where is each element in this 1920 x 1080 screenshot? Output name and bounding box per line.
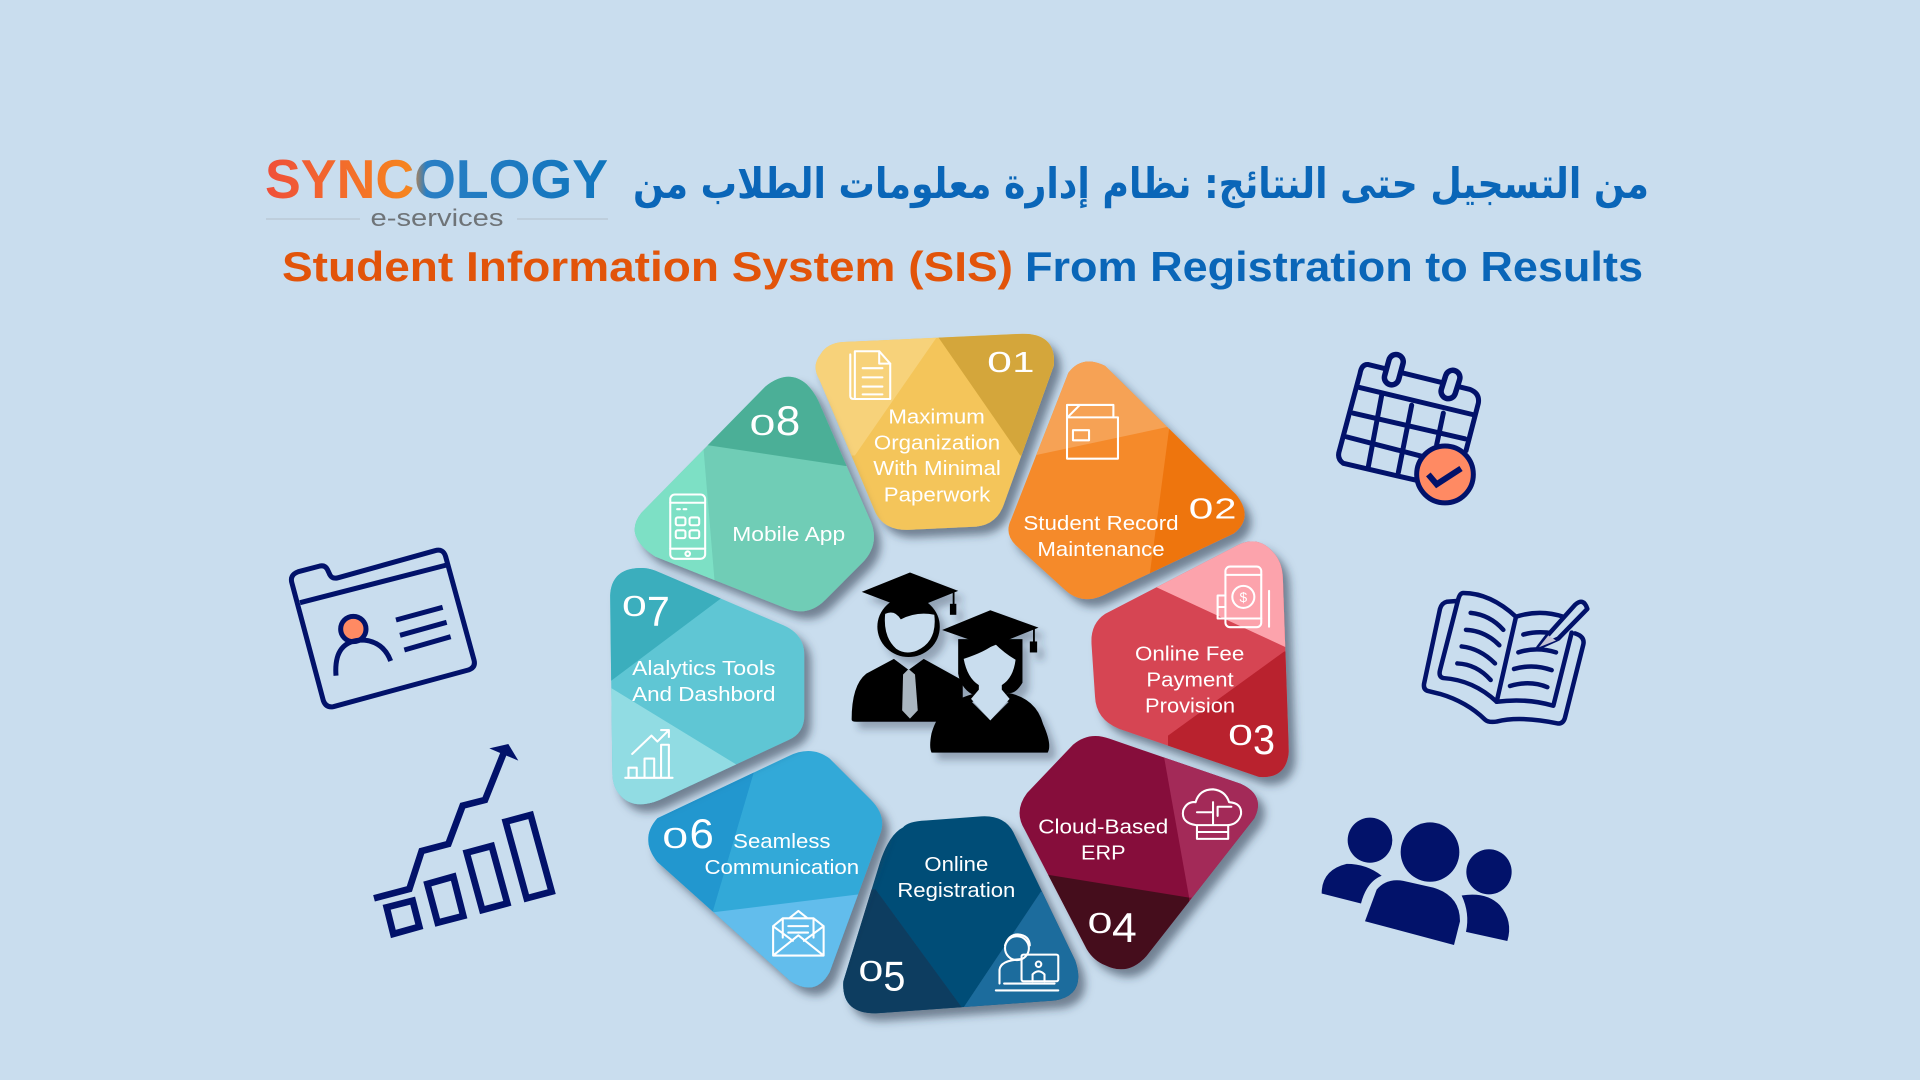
- segment 04: Cloud-Based ERP: Cloud-Based: [1038, 816, 1168, 838]
- segment 01: Maximum Organization: 1: [1012, 347, 1034, 379]
- segment 03: Online Fee Payment: Payment: [1146, 669, 1234, 691]
- icon: envelope: [773, 911, 824, 956]
- icon: phone payment: [1218, 567, 1269, 627]
- segment 03: Online Fee Payment: Online Fee: [1135, 643, 1244, 665]
- segment 02: Student Record: Maintenance: [1037, 539, 1165, 561]
- graduate: female: [930, 610, 1049, 753]
- segment 01: Maximum Organization: Paperwork: [884, 484, 991, 506]
- logo: Syncology e-services: SYNCOLOGY: [265, 148, 608, 210]
- graduate: male: [852, 573, 963, 722]
- icon: calendar with check: [1339, 362, 1479, 503]
- segment 07: Analytics Tools: 0: [622, 591, 647, 623]
- logo: Syncology e-services: e-services: [370, 205, 504, 232]
- title: English: [282, 243, 1643, 290]
- segment 06: Seamless Communication: 0: [662, 823, 688, 855]
- infographic canvas: [266, 160, 1646, 1027]
- segment 04: Cloud-Based ERP: 4: [1112, 905, 1137, 951]
- segment 05: Online Registration: Registration: [897, 880, 1015, 902]
- segment 08: Mobile App: [623, 366, 885, 618]
- icon: smartphone: [670, 494, 705, 559]
- segment 03: Online Fee Payment: Provision: [1145, 696, 1235, 718]
- title: Arabic: من التسجيل حتى النتائج: نظام إدارة معلومات الطلاب من: [633, 159, 1649, 209]
- segment 02: Student Record: Student Record: [1023, 513, 1179, 535]
- segment 06: Seamless Communication: Communication: [704, 857, 859, 879]
- segment 02: Student Record: [1000, 352, 1257, 609]
- icon: person at computer: [996, 934, 1058, 990]
- title: English: From Registration to Results: [1025, 243, 1643, 290]
- icon: cloud server: [1183, 789, 1241, 839]
- segment 05: Online Registration: Online: [924, 854, 988, 876]
- segment 03: Online Fee Payment: 3: [1253, 717, 1275, 763]
- segment 08: Mobile App: 8: [776, 398, 800, 444]
- segment 08: Mobile App: Mobile App: [732, 524, 845, 546]
- icon: group of people: [1322, 818, 1512, 945]
- segment 01: Maximum Organization: With Minimal: [873, 458, 1001, 480]
- segment 01: Maximum Organization: 0: [987, 347, 1012, 379]
- segment 04: Cloud-Based ERP: 0: [1088, 908, 1112, 940]
- segment 05: Online Registration: 0: [859, 956, 883, 988]
- segment 01: Maximum Organization: Organization: [874, 432, 1000, 454]
- icon: folder: [1067, 405, 1118, 459]
- segment 07: Analytics Tools: 7: [647, 588, 670, 634]
- icon: open book with pencil: [1424, 593, 1587, 724]
- segment 02: Student Record: 2: [1214, 493, 1236, 525]
- title: English: Student Information System (SIS): [282, 243, 1013, 290]
- segment 05: Online Registration: [834, 807, 1091, 1023]
- segment 02: Student Record: 0: [1189, 493, 1213, 525]
- segment 03: Online Fee Payment: 0: [1228, 720, 1253, 752]
- segment 07: Analytics Tools: Alalytics Tools: [632, 658, 775, 680]
- segment 05: Online Registration: 5: [883, 953, 905, 999]
- segment 04: Cloud-Based ERP: ERP: [1081, 843, 1126, 865]
- segment 03: Online Fee Payment: [1082, 531, 1298, 784]
- center icon: graduates: [852, 573, 1049, 753]
- segment 01: Maximum Organization: [807, 329, 1064, 536]
- icon: document: [850, 351, 890, 399]
- segment 07: Analytics Tools: [605, 559, 811, 811]
- segment 03: Online Fee Payment: $: [1240, 590, 1248, 605]
- segment 07: Analytics Tools: And Dashbord: [632, 684, 775, 706]
- icon: student ID folder: [291, 550, 474, 707]
- icon: growth chart: [625, 730, 673, 778]
- segment 06: Seamless Communication: Seamless: [733, 831, 831, 853]
- segment 06: Seamless Communication: 6: [690, 811, 714, 857]
- segment 06: Seamless Communication: [641, 742, 889, 995]
- segment 04: Cloud-Based ERP: [1013, 729, 1270, 977]
- wheel diagram: [605, 329, 1298, 1023]
- segment 01: Maximum Organization: Maximum: [888, 406, 985, 428]
- icon: growth chart with arrow: [374, 744, 552, 934]
- segment 08: Mobile App: 0: [750, 410, 775, 442]
